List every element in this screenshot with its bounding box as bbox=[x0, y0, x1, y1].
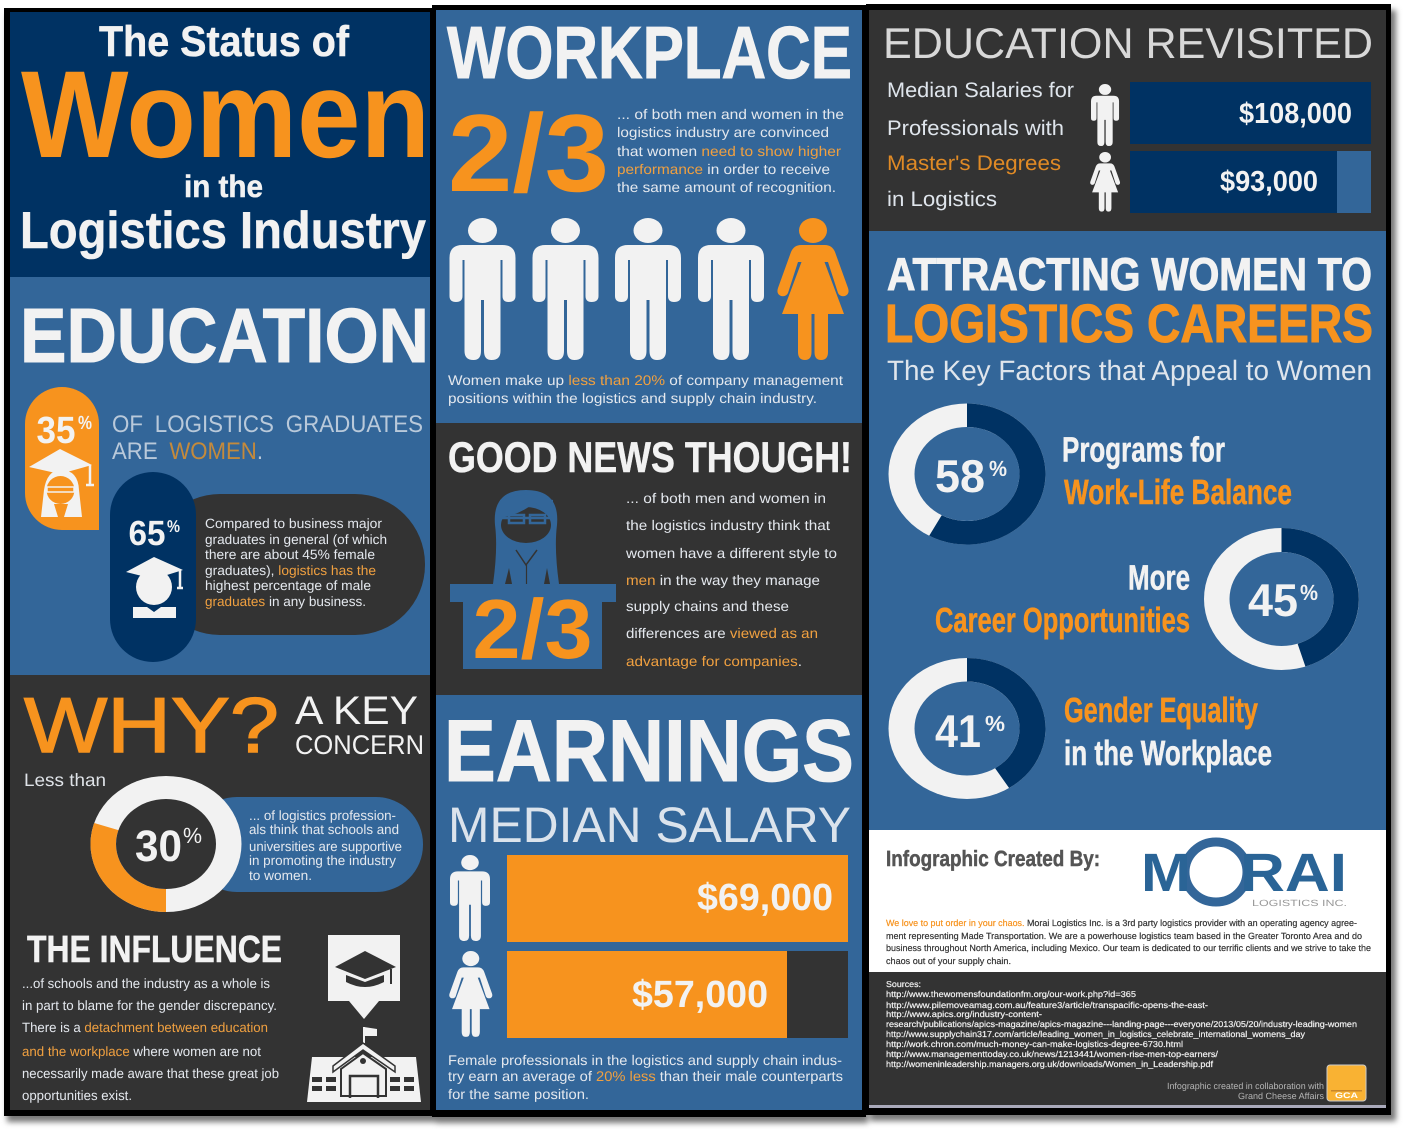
logo: morai logistics: RAI bbox=[1240, 843, 1347, 903]
text: sources list: http://womeninleadership.managers.org.uk/downloads/Women_in_Leadership.pdf bbox=[886, 1059, 1214, 1069]
label: career opportunities: More bbox=[1128, 558, 1190, 598]
logo: gca: GCA bbox=[1335, 1091, 1358, 1100]
text: masters salaries: Professionals with bbox=[887, 117, 1064, 140]
callout: schools and universities: ... of logistics profession- bbox=[249, 808, 396, 823]
text: influence body: in part to blame for the gender discrepancy. bbox=[22, 998, 277, 1013]
text: sources list: http://www.apics.org/industry-content- bbox=[886, 1009, 1042, 1019]
bar: male salary bbox=[507, 855, 848, 942]
heading: the influence: THE INFLUENCE bbox=[27, 929, 282, 971]
logo: morai logistics: LOGISTICS INC. bbox=[1252, 898, 1347, 908]
panel: title: in the bbox=[184, 169, 263, 204]
panel: title: The Status of bbox=[99, 18, 350, 66]
label: work-life balance bbox=[1062, 430, 1292, 512]
bar: female salary bbox=[507, 951, 848, 1038]
text: different style: advantage for companies . bbox=[626, 653, 802, 669]
label: career opportunities: Career Opportunities bbox=[935, 601, 1190, 640]
heading: infographic created by: Infographic Created By: bbox=[886, 846, 1100, 871]
icon row: four men and one woman bbox=[450, 218, 849, 360]
callout: 65 percent male graduates: graduates), logistics has the bbox=[205, 563, 376, 578]
subheading: key factors: The Key Factors that Appeal to Women bbox=[887, 355, 1372, 386]
chart: 58 percent donut: % bbox=[989, 456, 1007, 481]
panel: education revisited bbox=[869, 10, 1386, 231]
text: masters salaries: Master's Degrees bbox=[887, 152, 1061, 175]
text: recognition: ... of both men and women in the bbox=[617, 106, 844, 122]
label: gender equality: Gender Equality bbox=[1064, 691, 1258, 730]
chart: 58 percent donut bbox=[888, 404, 1046, 544]
callout: 65 percent male graduates: 65 bbox=[128, 514, 166, 553]
heading: education revisited: EDUCATION REVISITED bbox=[883, 20, 1373, 68]
text: different style: the logistics industry think that bbox=[626, 517, 830, 533]
text: masters salaries: in Logistics bbox=[887, 188, 997, 211]
text: management share: Women make up less than 20% of company management bbox=[448, 372, 843, 388]
text: sources list: http://www.managementtoday.co.uk/news/1213441/women-rise-men-top-earners/ bbox=[886, 1049, 1219, 1059]
label: career opportunities bbox=[935, 558, 1190, 640]
text: influence body: ...of schools and the industry as a whole is bbox=[22, 976, 270, 991]
text: about morai: business throughout North America, including Mexico. Our team is dedicated to our terrific clients and we strive to take the bbox=[886, 943, 1371, 953]
logo: gca bbox=[1327, 1065, 1366, 1101]
panel: education bbox=[10, 277, 430, 675]
callout: 65 percent male graduates: % bbox=[167, 517, 180, 536]
text: masters salaries bbox=[887, 79, 1074, 211]
panel: earnings bbox=[436, 695, 862, 1110]
text: earnings gap bbox=[448, 1052, 843, 1102]
chart: 30 percent donut: 30 bbox=[135, 822, 182, 871]
text: sources list: Sources: bbox=[886, 979, 921, 989]
text: influence body: and the workplace where women are not bbox=[22, 1044, 261, 1059]
text: sources list: http://www.thewomensfoundationfm.org/our-work.php?id=365 bbox=[886, 989, 1136, 999]
callout: schools and universities: als think that schools and bbox=[249, 822, 399, 837]
panel: why bbox=[10, 675, 430, 1110]
callout: schools and universities bbox=[190, 797, 423, 892]
logo: morai logistics bbox=[1141, 842, 1347, 908]
icon: school building bbox=[307, 1027, 421, 1102]
label: gender equality bbox=[1064, 691, 1272, 773]
stat: 35 percent women graduates: % bbox=[78, 413, 92, 434]
heading: why a key concern bbox=[24, 681, 424, 769]
bar: female masters salary bbox=[1130, 151, 1371, 213]
callout: schools and universities: in promoting the industry bbox=[249, 853, 396, 868]
text: influence body: opportunities exist. bbox=[22, 1088, 132, 1103]
callout: 65 percent male graduates: graduates in general (of which bbox=[205, 532, 387, 547]
heading: attracting women to logistics careers bbox=[885, 248, 1373, 354]
bar: female salary: $57,000 bbox=[632, 974, 768, 1016]
text: recognition: logistics industry are convinced bbox=[617, 124, 829, 140]
callout: schools and universities: universities are supportive bbox=[249, 839, 402, 854]
text: influence body bbox=[22, 976, 279, 1103]
panel: workplace bbox=[436, 10, 862, 423]
chart: 45 percent donut: % bbox=[1300, 580, 1318, 605]
text: management share: positions within the logistics and supply chain industry. bbox=[448, 390, 817, 406]
text: collaboration credit bbox=[1167, 1081, 1324, 1101]
panel: title: Women bbox=[21, 46, 430, 184]
text: recognition bbox=[617, 106, 844, 195]
stat: two thirds: 2/3 bbox=[448, 92, 609, 215]
text: about morai: We love to put order in your chaos. Morai Logistics Inc. is a 3rd party logistics provider with an operating agency agree- bbox=[886, 918, 1357, 928]
bar: male masters salary bbox=[1130, 82, 1371, 144]
heading: why a key concern: CONCERN bbox=[295, 730, 424, 760]
stat: 35 percent women graduates bbox=[25, 387, 99, 530]
text: different style: differences are viewed as an bbox=[626, 625, 818, 641]
heading: why a key concern: WHY? bbox=[24, 681, 279, 769]
panel: created by bbox=[869, 830, 1386, 972]
text: collaboration credit: Infographic created in collaboration with bbox=[1167, 1081, 1324, 1091]
text: different style: supply chains and these bbox=[626, 598, 789, 614]
text: sources list: http://www.pilemoveamag.com.au/feature3/article/transpacific-opens-the-east- bbox=[886, 1000, 1208, 1010]
icon: man bbox=[450, 855, 490, 941]
panel: title bbox=[10, 12, 430, 277]
heading: why a key concern: A KEY bbox=[295, 689, 418, 733]
heading: education: EDUCATION bbox=[20, 293, 429, 379]
callout: schools and universities: to women. bbox=[249, 868, 312, 883]
callout: 65 percent male graduates: graduates in any business. bbox=[205, 594, 366, 609]
icon: speech bubble with graduation cap bbox=[328, 935, 400, 1019]
text: of logistics graduates are women: ARE WOMEN. bbox=[112, 438, 263, 465]
callout: 65 percent male graduates: Compared to business major bbox=[205, 516, 383, 531]
icon: woman small bbox=[1090, 152, 1120, 212]
label: work-life balance: Work-Life Balance bbox=[1064, 473, 1292, 512]
heading: workplace: WORKPLACE bbox=[447, 11, 852, 94]
heading: good news though: GOOD NEWS THOUGH! bbox=[448, 434, 852, 482]
text: different style: men in the way they manage bbox=[626, 572, 820, 588]
subheading: median salary: MEDIAN SALARY bbox=[448, 797, 851, 853]
text: sources list bbox=[886, 979, 1357, 1069]
text: about morai: chaos out of your supply chain. bbox=[886, 956, 1011, 966]
chart: 45 percent donut: 45 bbox=[1248, 574, 1298, 626]
label: gender equality: in the Workplace bbox=[1064, 734, 1272, 773]
text: masters salaries: Median Salaries for bbox=[887, 79, 1074, 102]
icon: woman bbox=[449, 951, 492, 1037]
text: about morai bbox=[886, 918, 1371, 966]
bar: male masters salary: $108,000 bbox=[1239, 98, 1352, 130]
chart: 30 percent donut: % bbox=[183, 823, 202, 848]
text: sources list: http://work.chron.com/much-money-can-make-logistics-degree-6730.html bbox=[886, 1039, 1183, 1049]
callout: 65 percent male graduates bbox=[110, 472, 425, 662]
text: influence body: necessarily made aware that these great job bbox=[22, 1066, 279, 1081]
text: collaboration credit: Grand Cheese Affairs bbox=[1238, 1091, 1324, 1101]
stat: 35 percent women graduates: 35 bbox=[36, 410, 76, 452]
bar: female masters salary: $93,000 bbox=[1220, 166, 1318, 198]
text: of logistics graduates are women: OF LOGISTICS GRADUATES bbox=[112, 411, 423, 438]
callout: 65 percent male graduates: there are about 45% female bbox=[205, 547, 375, 562]
heading: earnings: EARNINGS bbox=[444, 701, 854, 800]
callout: 65 percent male graduates: highest percentage of male bbox=[205, 578, 371, 593]
text: earnings gap: Female professionals in the logistics and supply chain indus- bbox=[448, 1052, 842, 1068]
icon: woman behind desk: 2/3 bbox=[472, 582, 592, 676]
text: about morai: ment representing Made Transportation. We are a powerhouse logistics team based in the Greater Toronto Area and do bbox=[886, 931, 1362, 941]
chart: 41 percent donut bbox=[888, 658, 1046, 799]
chart: 41 percent donut: % bbox=[985, 711, 1005, 736]
text: recognition: that women need to show higher bbox=[617, 143, 841, 159]
text: different style: women have a different style to bbox=[625, 545, 837, 561]
chart: 58 percent donut: 58 bbox=[935, 450, 985, 502]
text: of logistics graduates are women bbox=[112, 411, 423, 465]
panel: good news bbox=[436, 423, 862, 695]
text: management share bbox=[448, 372, 843, 406]
text: recognition: performance in order to receive bbox=[617, 161, 830, 177]
text: sources list: http://www.supplychain317.com/article/leading_women_in_logistics_celebrate_international_womens_day bbox=[886, 1029, 1306, 1039]
chart: 41 percent donut: 41 bbox=[935, 705, 981, 757]
label: work-life balance: Programs for bbox=[1062, 430, 1225, 470]
text: influence body: There is a detachment between education bbox=[22, 1020, 268, 1035]
text: recognition: the same amount of recognition. bbox=[617, 179, 836, 195]
chart: 45 percent donut bbox=[1204, 528, 1359, 670]
text: earnings gap: try earn an average of 20% less than their male counterparts bbox=[448, 1068, 843, 1084]
text: different style bbox=[625, 490, 837, 669]
panel: title: Logistics Industry bbox=[20, 202, 426, 260]
chart: 30 percent donut bbox=[90, 776, 242, 912]
icon: woman behind desk bbox=[450, 490, 616, 676]
panel: sources bbox=[869, 972, 1386, 1108]
icon: man small bbox=[1091, 84, 1119, 146]
bar: male salary: $69,000 bbox=[697, 877, 833, 919]
text: different style: ... of both men and women in bbox=[626, 490, 826, 506]
text: less than: Less than bbox=[24, 770, 106, 790]
text: sources list: research/publications/apics-magazine/apics-magazine---landing-page---everyone/2013/05/20/industry-leading-women bbox=[886, 1019, 1357, 1029]
text: earnings gap: for the same position. bbox=[448, 1086, 589, 1102]
logo: morai logistics: M bbox=[1141, 843, 1191, 903]
panel: attracting women bbox=[869, 231, 1386, 830]
